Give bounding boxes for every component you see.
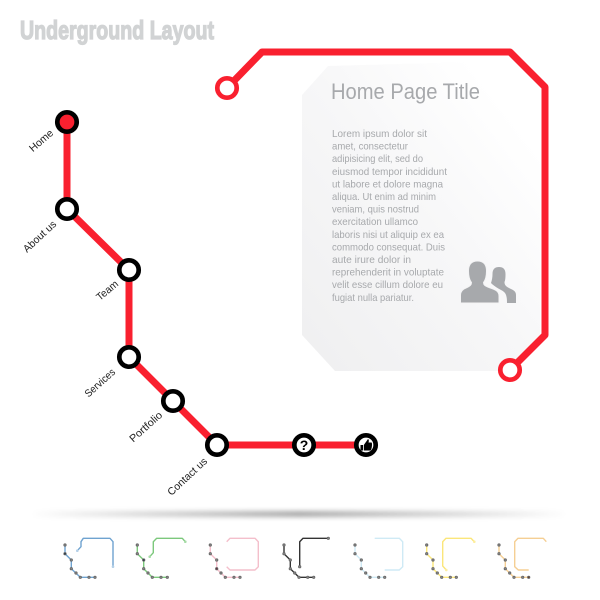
title: Underground Layout [20,15,214,45]
panel body text: Lorem ipsum dolor sit [332,128,427,140]
panel body text: ut labore et dolore magna [332,178,443,190]
station: portfolio [163,391,183,411]
panel body text [332,128,447,304]
panel body text: exercitation ullamco [332,216,418,228]
station: about us [57,199,77,219]
variant: orange [498,538,546,578]
panel body text: reprehenderit in voluptate [332,267,444,279]
station: thumbs up [356,435,376,455]
ground shadow [30,511,568,517]
station: home [57,112,77,132]
variant: green [136,538,187,578]
variant: black [283,537,329,578]
variant: pink [209,538,258,578]
panel body text: eiusmod tempor incididunt [332,166,447,178]
variant: blue [64,538,114,578]
label: contact us: Contact us [165,455,210,498]
panel body text: fugiat nulla pariatur. [332,292,414,304]
panel body text: commodo consequat. Duis [332,241,445,253]
panel body text: velit esse cillum dolore eu [332,279,443,291]
variant: light blue [354,538,403,578]
panel body text: veniam, quis nostrud [332,204,419,216]
label: services: Services [82,366,118,400]
label: portfolio: Portfolio [127,409,165,445]
theme variants [64,537,546,578]
terminal: top left [217,78,237,98]
station labels [21,127,210,498]
label: about us: About us [21,218,59,255]
metro navigation line [57,112,376,455]
panel body text: laboris nisi ut aliquip ex ea [332,229,444,241]
connector line around panel [217,52,545,380]
station: question: ? [300,437,308,453]
panel body text: adipisicing elit, sed do [332,153,423,165]
panel body text: amet, consectetur [332,141,408,153]
label: team: Team [94,278,121,303]
variant: yellow [426,538,476,578]
station: question [294,435,314,455]
station: services [119,347,139,367]
label: home: Home [27,127,56,155]
station: team [119,260,139,280]
terminal: bottom right [500,360,520,380]
panel: content card [302,60,540,371]
icon: users [460,261,516,303]
station: contact us [207,435,227,455]
panel body text: aute irure dolor in [332,254,411,266]
panel body text: aliqua. Ut enim ad minim [332,191,436,203]
panel heading: Home Page Title [331,79,480,104]
